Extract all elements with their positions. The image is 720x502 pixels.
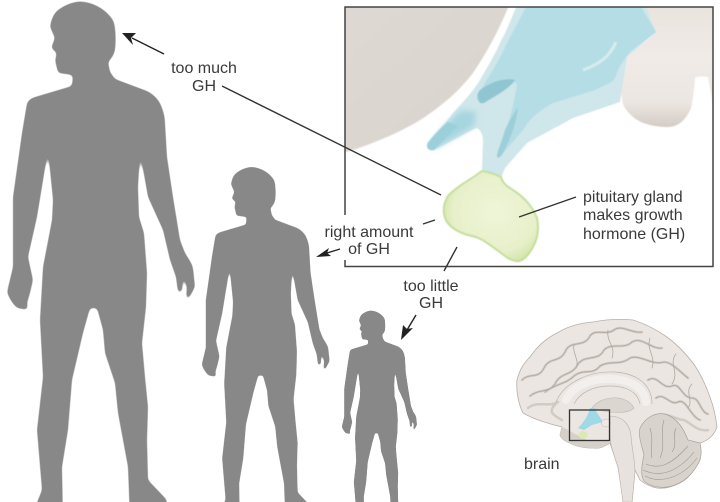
arrow: toward tall person (122, 33, 164, 54)
cerebellum folds (643, 420, 697, 479)
mid blue left arm (430, 110, 476, 148)
label: too much GH: GH (192, 78, 216, 95)
inset frame (570, 410, 610, 440)
darker blue shading at fold (478, 79, 515, 103)
label: right amount of GH: of GH (348, 241, 390, 258)
arrow: toward average person (316, 248, 340, 257)
brain outline (517, 319, 717, 502)
label: too much GH: too much (171, 60, 237, 77)
leader: pituitary label (519, 197, 576, 217)
hypothalamus tissue at upper left (340, 3, 510, 154)
leader: right amount stub (423, 220, 435, 224)
label: too little GH: GH (419, 295, 443, 312)
label: right amount of GH: right amount (325, 224, 414, 241)
leader: too much GH to gland (222, 86, 441, 195)
beige chiasm detail (602, 419, 610, 427)
thalamus (592, 398, 634, 412)
blue hypothalamus detail (578, 408, 603, 430)
label: too little GH: too little (403, 278, 459, 295)
label: pituitary gland: makes growth (583, 207, 683, 224)
lower frontal tissue (560, 427, 610, 448)
brain illustration (517, 319, 717, 502)
brainstem (610, 416, 635, 502)
optic chiasm tissue at right (620, 3, 716, 127)
green pituitary detail (578, 431, 588, 439)
label: pituitary gland: hormone (GH) (583, 226, 685, 243)
label: brain: brain (524, 456, 560, 473)
darker blue tail (427, 122, 458, 150)
silhouette: tall person, too much GH (7, 2, 195, 502)
label: pituitary gland: pituitary gland (583, 189, 683, 206)
panel: pituitary close-up (340, 3, 716, 266)
leader: too little stub (444, 247, 457, 271)
silhouette: average person, right amount of GH (202, 167, 330, 502)
hypothalamus blue inner layer (477, 5, 656, 157)
stalk shade (497, 108, 518, 157)
gyri soft shading (522, 328, 708, 430)
silhouette: short person, too little GH (342, 311, 417, 502)
gyri dark folds (522, 328, 708, 420)
pituitary gland (444, 171, 538, 261)
cerebellum (639, 414, 701, 487)
panel frame (345, 7, 713, 266)
arrow: toward short person (401, 315, 416, 340)
highlight (583, 42, 616, 70)
hypothalamus blue outer layer (427, 5, 656, 178)
corpus callosum (566, 379, 646, 402)
